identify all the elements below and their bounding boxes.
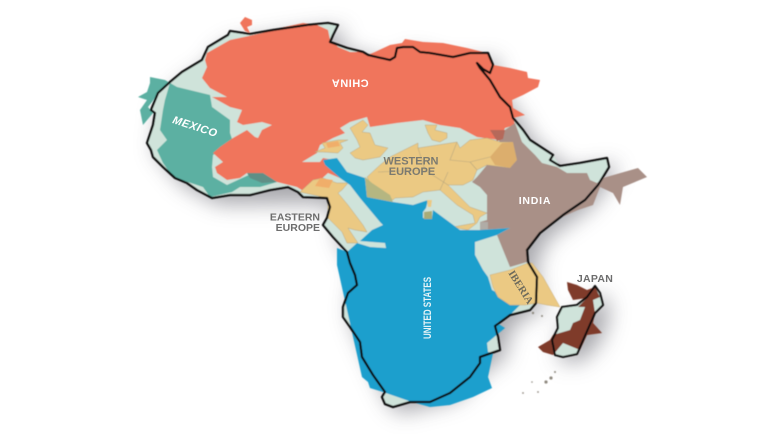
- island: Corsica: [427, 200, 432, 207]
- country: Japan: [538, 282, 602, 355]
- label: Japan: JAPAN: [577, 273, 613, 285]
- drop shadow behind Africa: [154, 29, 616, 413]
- label: China: CHINA: [331, 76, 369, 88]
- outline: Africa coast: [147, 23, 609, 407]
- country: United States: [323, 158, 520, 407]
- label: Eastern Europe: EUROPE: [276, 222, 320, 234]
- country: India: [472, 123, 647, 267]
- island: Sardinia: [424, 211, 432, 219]
- country: Mexico: [138, 77, 277, 197]
- countries: Eastern Europe: [300, 178, 367, 243]
- label: Eastern Europe: EASTERN: [270, 212, 320, 224]
- label: Mexico: MEXICO: [171, 114, 219, 140]
- outline: Madagascar coast: [552, 286, 603, 357]
- countries: Western Europe: [315, 120, 517, 230]
- region: olive overlap: [365, 177, 393, 202]
- country: China: [202, 17, 540, 194]
- label: India: INDIA: [519, 195, 551, 207]
- region: grey overlap: [480, 222, 488, 230]
- country: Iberia: [490, 263, 560, 307]
- overlap: India and China: [490, 130, 505, 141]
- label: United States: UNITED STATES: [422, 277, 434, 339]
- overlap: Mexico and China: [247, 173, 277, 183]
- region: darker overlap near India: [490, 142, 517, 168]
- region: orange overlap: [315, 178, 333, 188]
- peach border lines: [378, 142, 490, 190]
- Madagascar land base: [552, 286, 603, 357]
- Africa land base: [147, 23, 609, 407]
- small islands: [522, 312, 556, 394]
- region: orange overlap Ireland: [326, 141, 340, 148]
- label: Iberia: IBERIA: [506, 269, 535, 307]
- label: Western Europe: WESTERN: [384, 156, 438, 168]
- label: Western Europe: EUROPE: [389, 166, 435, 178]
